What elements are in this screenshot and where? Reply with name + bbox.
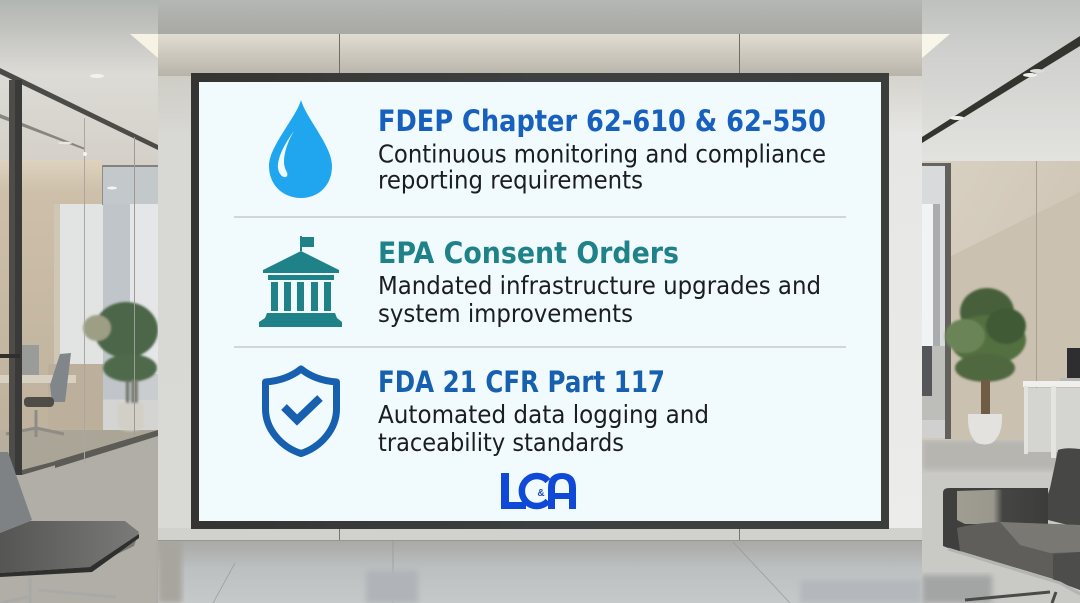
desk (1023, 348, 1080, 458)
left lounge chair (0, 452, 139, 603)
plant behind glass (83, 302, 158, 431)
ceiling track light (922, 36, 1080, 143)
heading: FDA: FDA 21 CFR Part 117 (378, 365, 665, 399)
text: EPA description: Mandated infrastructure upgrades and (378, 271, 821, 300)
text: FDA description (378, 400, 709, 457)
floor (0, 400, 1080, 603)
row: FDEP (269, 100, 826, 198)
text: FDA description: Automated data logging and (378, 400, 709, 429)
logo: LCA (501, 473, 576, 509)
glass mullions (0, 68, 158, 475)
screen frame (191, 73, 889, 529)
side window (922, 163, 946, 438)
right room (922, 36, 1080, 458)
feature wall (158, 34, 922, 541)
icon: shield with check (266, 369, 336, 454)
text: FDA description: traceability standards (378, 428, 624, 457)
screen surface (199, 82, 881, 521)
icon: government building (259, 236, 342, 327)
cove lights (130, 34, 950, 58)
heading: EPA: EPA Consent Orders (378, 236, 679, 270)
display screen (191, 73, 889, 529)
potted plant (945, 288, 1026, 444)
icon: water drop (269, 100, 332, 198)
logo: LCA: & (537, 488, 545, 499)
text: FDEP description (378, 140, 826, 194)
heading: FDEP: FDEP Chapter 62-610 & 62-550 (378, 104, 826, 138)
text: FDEP description: Continuous monitoring and compliance (378, 140, 826, 168)
text: EPA description (378, 271, 821, 328)
text: EPA description: system improvements (378, 299, 633, 328)
text: FDEP description: reporting requirements (378, 166, 643, 194)
row: EPA (259, 236, 821, 328)
row: FDA (266, 365, 709, 457)
right sofa (943, 448, 1080, 603)
left glass office (0, 68, 158, 475)
office chair (6, 345, 71, 437)
ceiling (0, 0, 1080, 165)
ceiling lights (90, 74, 104, 78)
